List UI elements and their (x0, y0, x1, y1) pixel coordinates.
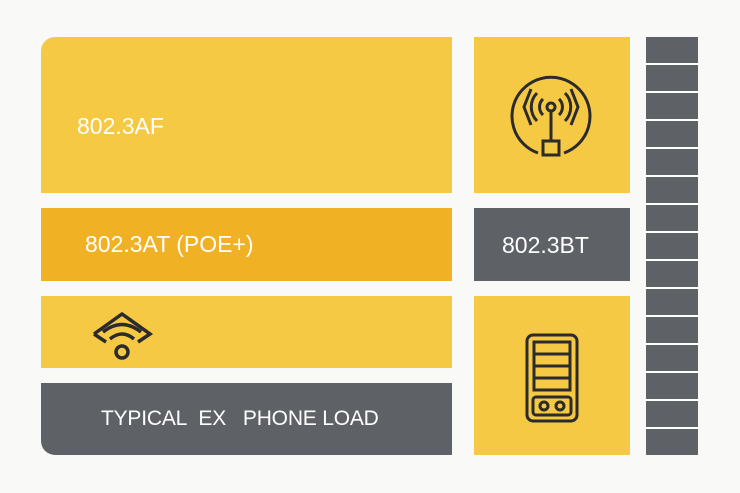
panel: segmented strip (646, 37, 698, 455)
panel: typical phone load (41, 383, 452, 455)
label: 802.3AT: 802.3AT (POE+) (85, 231, 254, 257)
panel: wifi icon (41, 296, 452, 368)
panel: 802.3BT (474, 208, 630, 281)
panel: antenna icon (474, 37, 630, 193)
panel: 802.3AT (POE+) (41, 208, 452, 281)
icon: phone (526, 334, 578, 422)
label: typical load: TYPICAL EX PHONE LOAD (101, 407, 379, 430)
panel: 802.3AF (41, 37, 452, 193)
label: 802.3AF: 802.3AF (77, 113, 164, 139)
icon: wifi (93, 312, 153, 360)
icon: antenna (510, 76, 592, 156)
panel: phone icon (474, 296, 630, 455)
label: 802.3BT: 802.3BT (502, 232, 589, 258)
